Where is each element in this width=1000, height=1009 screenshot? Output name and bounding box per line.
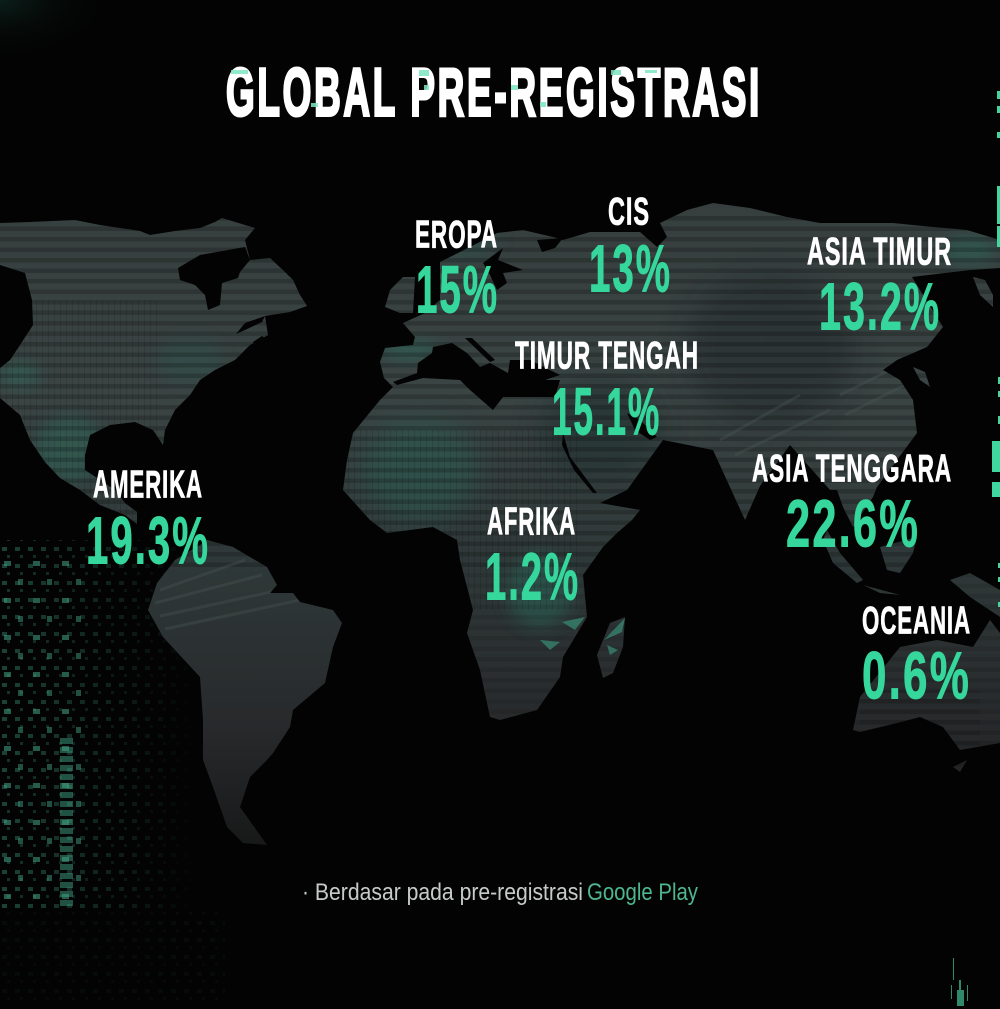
title (226, 56, 762, 130)
map land masses (0, 200, 1000, 860)
footnote: · Berdasar pada pre-registrasi (302, 879, 583, 906)
region: Afrika: 1.2% (485, 540, 580, 614)
region: Afrika: AFRIKA (487, 500, 576, 544)
map inland seas (0, 238, 657, 493)
region: Amerika: 19.3% (86, 504, 210, 578)
region: Eropa: 15% (416, 252, 499, 328)
footnote: Google Play (587, 879, 698, 906)
region: CIS (589, 190, 672, 306)
right edge green bars (992, 91, 1000, 607)
region: CIS: 13% (589, 232, 672, 306)
region: Oceania (862, 600, 971, 714)
region: Timur Tengah (515, 334, 699, 450)
region: Asia Timur (807, 230, 952, 344)
region: Amerika (86, 464, 210, 578)
region: Eropa: EROPA (415, 214, 498, 256)
region: Asia Tenggara: 22.6% (786, 486, 920, 562)
region: Amerika: AMERIKA (93, 464, 203, 506)
region: Asia Tenggara (752, 448, 952, 562)
region: CIS: CIS (608, 190, 650, 234)
region: Timur Tengah: TIMUR TENGAH (515, 334, 699, 378)
region: Afrika (485, 500, 580, 614)
map sea streak marks near Madagascar (540, 617, 625, 655)
region: Timur Tengah: 15.1% (552, 374, 661, 450)
region: Eropa (415, 214, 499, 328)
background green data matrix (2, 540, 172, 908)
antenna mark bottom right (951, 958, 968, 1006)
world map (0, 200, 1000, 860)
